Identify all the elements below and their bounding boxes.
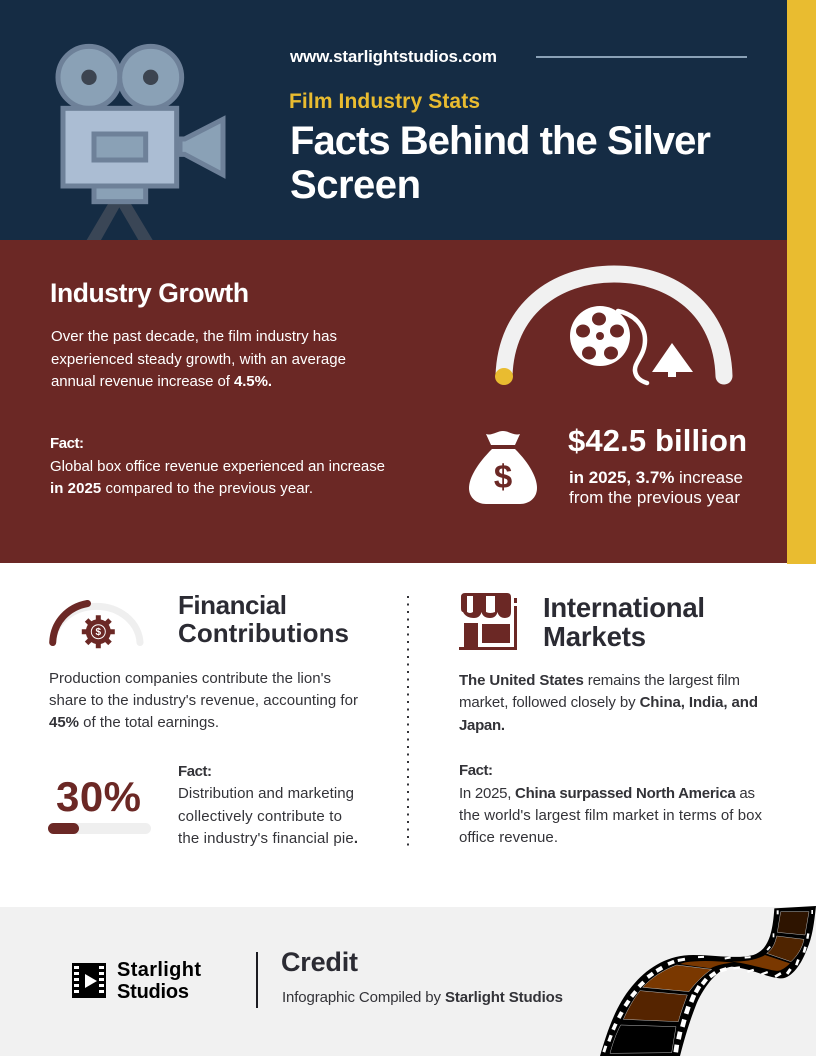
text: stat description: from the previous year (569, 488, 740, 507)
heading: financial contributions (178, 590, 349, 648)
icon: money bag (469, 431, 537, 504)
text: box office fact: Fact: (50, 435, 84, 452)
panel: footer (0, 906, 816, 1056)
text: distribution fact: Fact: (178, 763, 212, 780)
heading: financial contributions: Contributions (178, 618, 349, 648)
chart: growth gauge (495, 274, 724, 385)
logo: starlight studios: Studios (117, 981, 189, 1003)
text: distribution fact: the industry's financial pie. (178, 830, 358, 847)
text: china fact: office revenue. (459, 829, 558, 846)
heading: financial contributions: Financial (178, 590, 287, 620)
progress bar (48, 823, 151, 834)
chart: small gauge with gear: $ (96, 627, 102, 638)
chart: small gauge with gear (53, 604, 140, 648)
panel: header (0, 0, 787, 240)
panel: international markets (459, 592, 762, 846)
text: stat description (569, 468, 743, 507)
icon: movie camera (58, 46, 223, 240)
icon: storefront (459, 593, 517, 650)
text: credit line: Infographic Compiled by Starlight Studios (282, 989, 563, 1006)
text: box office fact (50, 435, 385, 497)
illustration: film strip (600, 906, 816, 1056)
text: financial summary: 45% of the total earnings. (49, 714, 219, 731)
text: china fact: the world's largest film market in terms of box (459, 807, 762, 824)
text: china fact: Fact: (459, 762, 493, 779)
title: Screen (290, 163, 421, 207)
title (290, 119, 711, 207)
heading: industry growth: Industry Growth (50, 278, 249, 308)
stat: 42.5 billion: $42.5 billion (568, 423, 747, 458)
icon: film reel with up arrow (570, 306, 693, 383)
website url: www.starlightstudios.com (289, 47, 497, 66)
text: distribution fact: collectively contribute to (178, 808, 342, 825)
text: stat description: in 2025, 3.7% increase (569, 468, 743, 487)
text: financial summary (49, 670, 358, 731)
text: growth summary: experienced steady growth, with an average (51, 351, 346, 368)
text: markets summary: The United States remains the largest film (459, 672, 740, 689)
panel: financial contributions (48, 590, 358, 847)
heading: international markets (543, 592, 705, 652)
text: financial summary: share to the industry's revenue, accounting for (49, 692, 358, 709)
title: Facts Behind the Silver (290, 119, 711, 163)
eyebrow heading: Film Industry Stats (289, 90, 480, 113)
text: growth summary: annual revenue increase of 4.5%. (51, 373, 272, 390)
text: markets summary: Japan. (459, 717, 505, 734)
text: box office fact: Global box office revenue experienced an increase (50, 458, 385, 475)
logo: starlight studios: Starlight (117, 959, 201, 981)
text: markets summary: market, followed closely by China, India, and (459, 694, 758, 711)
text: growth summary: Over the past decade, the film industry has (51, 328, 337, 345)
text: distribution fact: Distribution and marketing (178, 785, 354, 802)
text: financial summary: Production companies contribute the lion's (49, 670, 331, 687)
heading: international markets: Markets (543, 621, 646, 652)
text: china fact (459, 762, 762, 846)
text: distribution fact (178, 763, 358, 847)
logo: starlight studios (72, 959, 201, 1003)
text: markets summary (459, 672, 758, 734)
text: box office fact: in 2025 compared to the previous year. (50, 480, 313, 497)
heading: credit: Credit (281, 947, 358, 977)
heading: international markets: International (543, 592, 705, 623)
text: growth summary (51, 328, 346, 390)
text: china fact: In 2025, China surpassed North America as (459, 785, 755, 802)
icon: money bag: $ (494, 458, 512, 495)
yellow side bar (787, 0, 816, 564)
stat: 30 percent: 30% (56, 773, 141, 820)
panel: industry growth (0, 240, 787, 563)
